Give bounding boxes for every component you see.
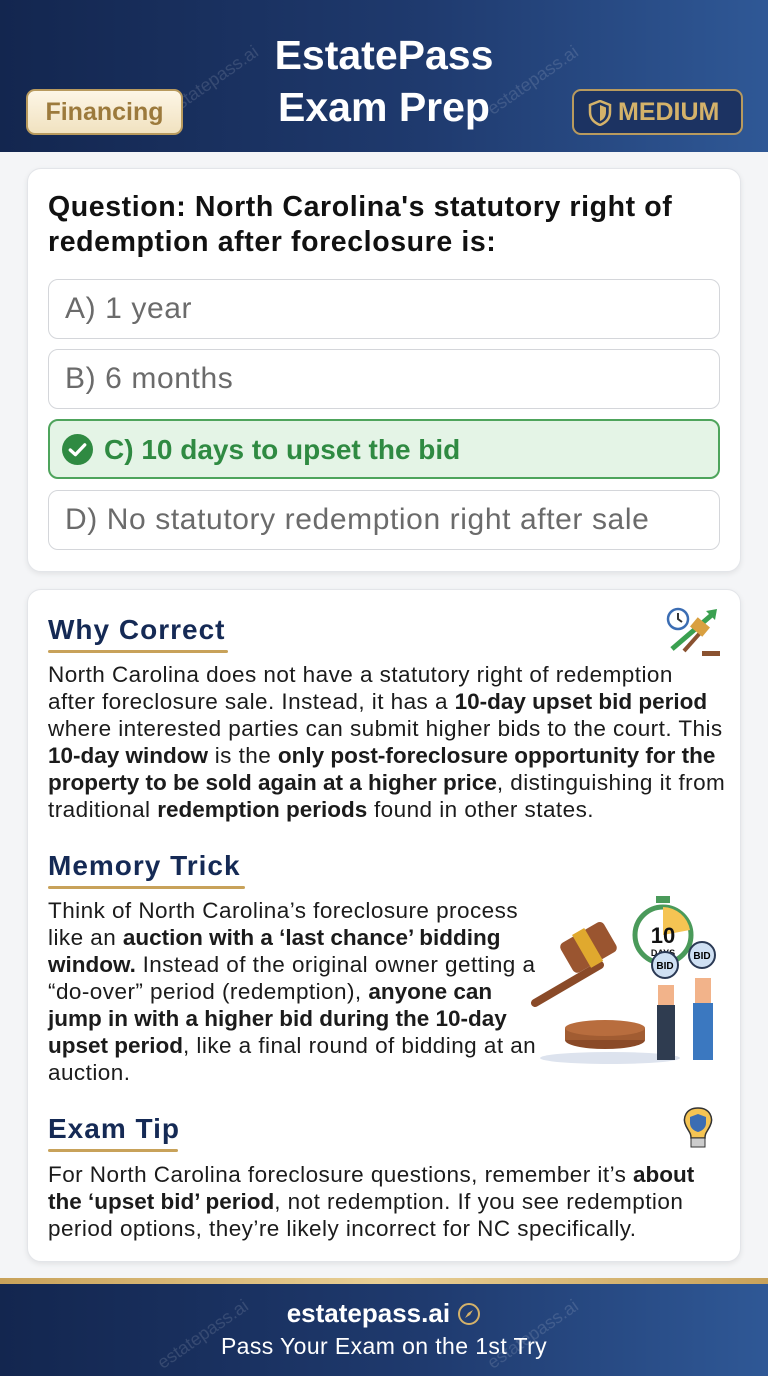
badge: difficulty: MEDIUM [618,98,719,126]
question text: Question: North Carolina's statutory right of [48,191,672,223]
option C correct [48,419,720,479]
text: why correct: property to be sold again at a higher price, distinguishing it from [48,770,725,795]
text: exam tip [48,1162,694,1241]
text: why correct [48,662,725,822]
option A: A) 1 year [65,292,192,325]
question text: redemption after foreclosure is: [48,226,496,258]
text: memory trick: upset period, like a final round of bidding at an [48,1033,536,1058]
header: estatepass.ai [164,41,262,119]
text: why correct: after foreclosure sale. Instead, it has a 10-day upset bid period [48,689,707,714]
title: EstatePass [275,32,493,78]
option C correct: C) 10 days to upset the bid [104,434,460,465]
illustration: gavel, stopwatch, bids [531,896,716,1064]
illustration: gavel, stopwatch, bids: BID [656,961,674,972]
title [275,32,493,130]
option A [48,279,720,339]
text: why correct: North Carolina does not have a statutory right of redemption [48,662,673,687]
option B: B) 6 months [65,362,233,395]
text: memory trick [48,898,536,1085]
text: memory trick: like an auction with a ‘last chance’ bidding [48,925,500,950]
explanation card [27,589,741,1262]
badge: category [26,89,183,135]
badge: category: Financing [45,98,164,126]
footer: estatepass.ai [154,1295,252,1373]
badge: difficulty [572,89,743,135]
footer brand: estatepass.ai [287,1298,450,1328]
title: Exam Prep [278,84,490,130]
icon: gavel with arrow [666,608,720,656]
text: memory trick: jump in with a higher bid during the 10-day [48,1006,507,1031]
header [0,0,768,152]
footer: estatepass.ai [484,1295,582,1373]
option D: D) No statutory redemption right after sale [65,503,649,536]
text: why correct: where interested parties can submit higher bids to the court. This [48,716,723,741]
text: memory trick: window. Instead of the original owner getting a [48,952,535,977]
footer tagline: Pass Your Exam on the 1st Try [221,1333,547,1359]
text: memory trick: Think of North Carolina’s foreclosure process [48,898,518,923]
footer gold line [0,1278,768,1284]
question card [27,168,741,572]
icon: lightbulb with shield [684,1107,712,1148]
text: memory trick: “do-over” period (redemption), anyone can [48,979,492,1004]
text: why correct: 10-day window is the only post-foreclosure opportunity for the [48,743,715,768]
text: exam tip: the ‘upset bid’ period, not redemption. If you see redemption [48,1189,683,1214]
question text [48,191,672,258]
header: estatepass.ai [484,41,582,119]
illustration: gavel, stopwatch, bids: DAYS [651,948,675,958]
heading: exam tip: Exam Tip [48,1113,180,1144]
option D [48,490,720,550]
illustration: gavel, stopwatch, bids: BID [693,951,711,962]
footer [0,1284,768,1376]
text: exam tip: For North Carolina foreclosure questions, remember it’s about [48,1162,694,1187]
heading: why correct: Why Correct [48,614,225,645]
illustration: gavel, stopwatch, bids: 10 [651,923,675,948]
text: memory trick: auction. [48,1060,130,1085]
text: why correct: traditional redemption periods found in other states. [48,797,594,822]
text: exam tip: period options, they’re likely incorrect for NC specifically. [48,1216,636,1241]
option B [48,349,720,409]
heading: memory trick: Memory Trick [48,850,241,881]
